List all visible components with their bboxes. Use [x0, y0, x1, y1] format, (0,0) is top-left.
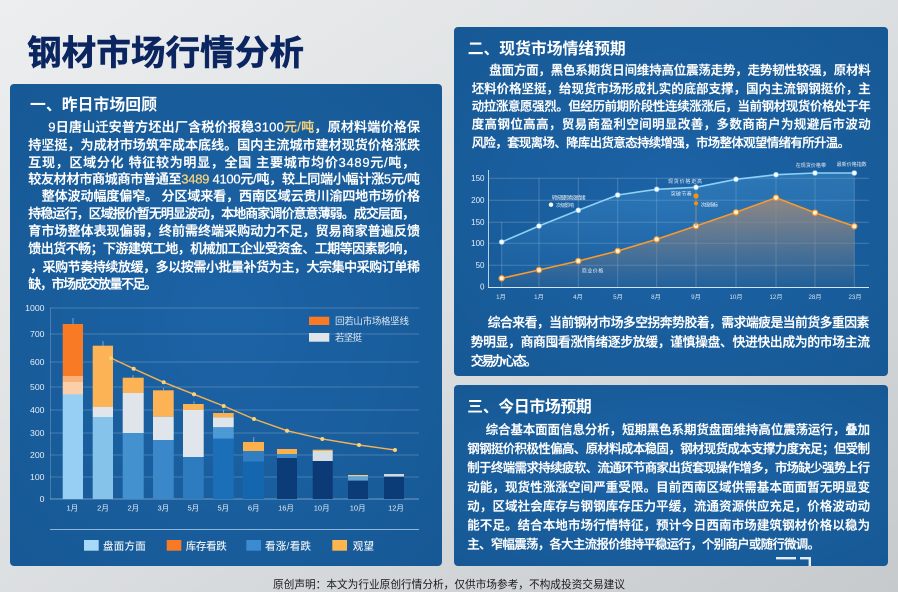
- bar chart: monthly stacked bars: [25, 303, 419, 512]
- heading: section three: 三、今日市场预期: [467, 397, 592, 416]
- category legend: 库存看跌: [186, 540, 227, 552]
- y axis labels: 0: [40, 494, 45, 504]
- blue series: [499, 171, 857, 244]
- annotations: 次级指标: [701, 202, 718, 208]
- panel: yesterday market review: [10, 84, 442, 566]
- x axis labels: 5月: [187, 504, 199, 512]
- x axis labels: 2月: [97, 504, 109, 512]
- category legend: 看涨/看跌: [265, 540, 312, 552]
- annotations: 最新价格指数: [837, 161, 867, 168]
- text block: market review: ，采购节奏持续放缓，多以按需小批量补货为主，大宗集中采购订单稀: [30, 259, 420, 274]
- annotations: 次级影响: [556, 202, 574, 209]
- y axis labels: 700: [30, 329, 45, 339]
- panel: spot market sentiment: [454, 27, 888, 376]
- y axis labels: 0: [480, 282, 485, 292]
- heading: section one: 一、昨日市场回顾: [30, 95, 157, 114]
- panel: today's market forecast: [454, 385, 888, 566]
- text block: market review: 馈出货不畅；下游建筑工地，机械加工企业受资金、工期等因素影响，: [28, 241, 415, 257]
- text block: sentiment: [472, 62, 871, 150]
- y axis labels: 100: [30, 472, 45, 482]
- y axis labels: 400: [30, 405, 45, 415]
- annotations: 在现货价格带: [796, 162, 826, 169]
- x axis labels: 1月: [534, 294, 544, 301]
- x axis labels: 10月: [729, 294, 743, 301]
- text block: forecast: 制于终端需求持续疲软、流通环节商家出货套现操作增多，市场缺少强势上行: [467, 460, 870, 475]
- y axis labels: [471, 174, 485, 292]
- x axis labels: 8月: [651, 294, 661, 301]
- text block: forecast: 动能，现货性涨涨空间严重受限。目前西南区域供需基本面面暂无明显变: [467, 479, 870, 494]
- annotations: 现货价格走高: [668, 178, 702, 185]
- y axis labels: 100: [471, 239, 485, 248]
- x axis labels: 3月: [157, 504, 169, 512]
- text block: sentiment: 坯料价格坚挺，给现货市场形成扎实的底部支撑，国内主流钢钢挺价，主: [472, 81, 871, 96]
- category legend: 观望: [353, 540, 374, 552]
- text block: forecast: 动，区域社会库存与钢钢库存压力平缓，流通资源供应充足，价格波动动: [467, 499, 870, 514]
- text block: summary: 势明显，商商囤看涨情绪逐步放缓，谨慎操盘、快进快出成为的市场主流: [471, 334, 870, 349]
- y axis labels: 600: [30, 357, 45, 367]
- y axis labels: 150: [471, 218, 485, 227]
- text block: summary: 交易办心态。: [471, 353, 537, 368]
- x axis labels: 23月: [848, 294, 862, 301]
- text block: forecast: 主、窄幅震荡，各大主流报价维持平稳运行，个别商户或随行微调。: [467, 537, 820, 552]
- y axis labels: [25, 303, 45, 504]
- text block: market review: 缺，市场成交放量不足。: [28, 277, 157, 292]
- y axis labels: 300: [30, 428, 45, 438]
- category legend: 盘面方面: [103, 540, 146, 552]
- text block: forecast: 能不足。结合本地市场行情特征，预计今日西南市场建筑钢材价格以稳为: [467, 518, 870, 533]
- text block: sentiment: 盘面方面，黑色系期货日间维持高位震荡走势，走势韧性较强，原材料: [489, 62, 871, 78]
- text block: summary: 综合来看，当前钢材市场多空拐奔势胶着，需求端疲是当前货多重因素: [488, 315, 870, 330]
- y axis labels: 150: [471, 174, 485, 183]
- x axis labels: 6月: [248, 504, 260, 512]
- line chart: price trend: [471, 161, 869, 301]
- annotations: 突破节奏: [671, 190, 692, 198]
- annotations: [549, 161, 867, 274]
- chart legend top: [309, 316, 409, 344]
- text block: market review: 整体波动幅度偏窄。 分区域来看，西南区域云贵川渝四地市场价格: [42, 188, 420, 203]
- text block: forecast: [467, 422, 870, 552]
- text block: market review: [28, 119, 420, 292]
- text block: market review: 互现，区域分化 特征较为明显，全国 主要城市均价3489元/吨，: [28, 155, 415, 170]
- text block: forecast: 综合基本面面信息分析，短期黑色系期货盘面维持高位震荡运行，叠加: [486, 422, 870, 437]
- text block: market review: 9日唐山迁安普方坯出厂含税价报稳3100元/吨，原材料端价格保: [48, 119, 420, 134]
- x axis labels: 5月: [613, 294, 623, 301]
- x axis labels: 5月: [217, 504, 229, 512]
- annotations: 转折跟踪看涨情绪: [552, 194, 586, 202]
- x axis labels: 10月: [314, 504, 330, 512]
- text block: market review: 较友材材市商城商市普通至3489 4100元/吨，较上同端小幅计涨5元/吨: [28, 172, 420, 187]
- trend line: [109, 356, 397, 452]
- bars: [63, 318, 404, 499]
- y axis labels: 200: [30, 450, 45, 460]
- title: 钢材市场行情分析: [27, 35, 304, 73]
- y axis labels: 50: [476, 261, 485, 270]
- x axis labels: 1月: [66, 504, 78, 512]
- x axis labels: [66, 504, 404, 512]
- x axis labels: 2月: [127, 504, 139, 512]
- text block: sentiment: 度高钢位高高，贸易商盈利空间明显改善，多数商商户为规避后市波动: [472, 116, 871, 132]
- text block: sentiment: 动拉涨意愿强烈。但经历前期阶段性连续涨涨后，当前钢材现货价格处于年: [472, 98, 871, 114]
- x axis labels: [496, 294, 862, 301]
- text block: market review: 持稳运行，区域报价暂无明显波动，本地商家调价意意薄弱。成交层面，: [28, 206, 415, 221]
- y axis labels: 500: [30, 382, 45, 392]
- text block: market review: 育市场整体表现偏弱，终前需终端采购动力不足，贸易商家普遍反馈: [28, 223, 420, 238]
- x axis labels: 9月: [691, 294, 701, 301]
- y axis labels: 200: [471, 196, 485, 205]
- icon: corner mark: [776, 557, 811, 566]
- orange series: [499, 195, 857, 281]
- x axis labels: 12月: [769, 294, 783, 301]
- chart legend top: 回若山市场格坚线: [335, 316, 409, 328]
- text block: market review: 持坚挺，为成材市场筑牢成本底线。国内主流城市建材现货价格涨跌: [28, 138, 420, 153]
- x axis labels: 28月: [808, 294, 822, 301]
- x axis labels: 16月: [278, 504, 294, 512]
- text block: sentiment: 风险，套现离场、降库出货意态持续增强，市场整体观望情绪有所升温。: [472, 135, 850, 150]
- y axis labels: 1000: [25, 303, 45, 313]
- x axis labels: 10月: [350, 504, 366, 512]
- text block: forecast: 钢钢挺价积极性偏高、原材料成本稳固，钢材现货成本支撑力度充足；但受制: [467, 441, 870, 456]
- category legend: [84, 540, 374, 552]
- x axis labels: 1月: [496, 294, 506, 301]
- annotations: 商业价格: [582, 268, 603, 274]
- text block: summary: [471, 315, 870, 368]
- chart legend top: 若坚挺: [335, 332, 362, 344]
- x axis labels: 12月: [388, 504, 404, 512]
- x axis labels: 4月: [573, 294, 583, 301]
- footer disclaimer: 原创声明：本文为行业原创行情分析，仅供市场参考，不构成投资交易建议: [273, 578, 625, 591]
- heading: section two: 二、现货市场情绪预期: [468, 39, 626, 58]
